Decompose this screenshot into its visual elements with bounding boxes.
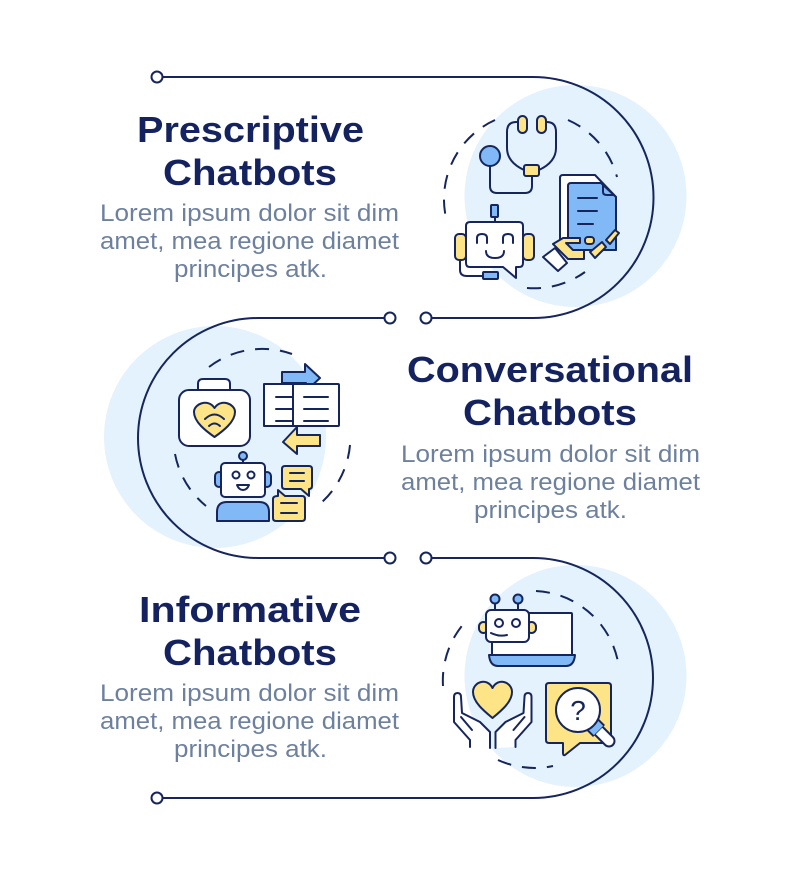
body text: amet, mea regione diamet	[100, 228, 399, 255]
body text: Lorem ipsum dolor sit dim	[100, 200, 399, 227]
start dot	[420, 552, 432, 564]
pale blue circle	[104, 326, 326, 548]
icon: question bubble with magnifier	[546, 683, 611, 755]
dashed ring	[444, 120, 617, 288]
pale blue circle	[464, 85, 686, 307]
body text: amet, mea regione diamet	[100, 708, 399, 735]
heading: Chatbots	[163, 152, 337, 193]
heading: Chatbots	[163, 632, 337, 673]
pale blue circle	[464, 565, 686, 787]
bottom end dot	[384, 552, 396, 564]
panel: informative chatbots	[100, 552, 686, 804]
connector line	[163, 558, 653, 798]
body text: principes atk.	[474, 497, 627, 524]
body text: principes atk.	[174, 736, 327, 763]
icon: robot support agent	[455, 205, 534, 279]
heading: Conversational	[407, 349, 693, 390]
start dot	[152, 72, 162, 82]
icon: robotic hand	[543, 230, 619, 271]
body text: principes atk.	[174, 256, 327, 283]
top end dot	[384, 312, 396, 324]
connector line	[163, 77, 654, 318]
panel: conversational chatbots	[104, 312, 700, 564]
icon: question bubble with magnifier: ?	[570, 695, 586, 726]
end dot	[152, 792, 162, 804]
icon: hands holding heart	[454, 682, 532, 748]
heading: Prescriptive	[137, 109, 364, 150]
icon: medical case with heart	[179, 379, 250, 446]
panel: prescriptive chatbots	[100, 72, 686, 324]
icon: open book with arrows	[264, 364, 339, 454]
body text: Lorem ipsum dolor sit dim	[100, 680, 399, 707]
heading: Informative	[139, 589, 361, 630]
body text: Lorem ipsum dolor sit dim	[401, 441, 700, 468]
connector line	[138, 318, 384, 558]
icon: document	[560, 175, 616, 250]
icon: stethoscope	[480, 116, 556, 193]
icon: robot on laptop	[479, 594, 575, 666]
icon: robot with chat bubbles	[215, 452, 312, 521]
dashed ring	[443, 591, 619, 768]
dashed ring	[175, 349, 350, 506]
heading: Chatbots	[463, 392, 637, 433]
end dot	[420, 312, 432, 324]
body text: amet, mea regione diamet	[401, 469, 700, 496]
